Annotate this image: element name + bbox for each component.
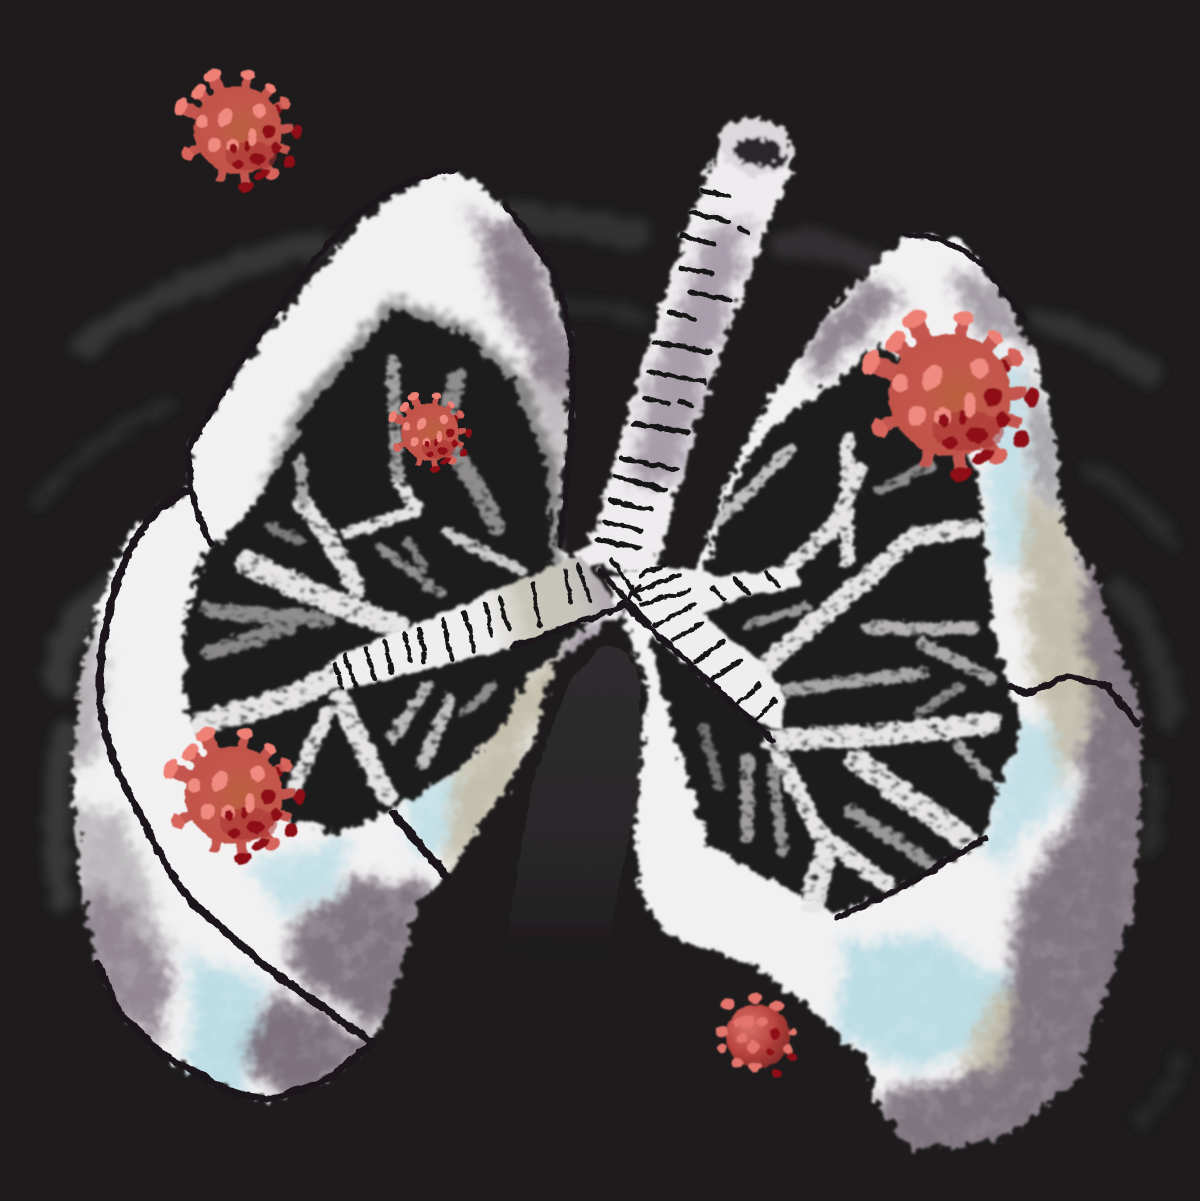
right main bronchus (605, 565, 800, 730)
faint rib strokes (40, 215, 1180, 1120)
right lung fill (610, 220, 1170, 1160)
left cavity chalk haze (250, 310, 552, 600)
cartilage rings on left bronchus (335, 566, 590, 688)
left main bronchus (328, 555, 625, 690)
left lung (60, 160, 640, 1110)
cartilage rings on right bronchus (600, 560, 778, 720)
virus: lower left lung (160, 724, 305, 865)
left inner dark cavity (183, 310, 590, 833)
right lung (610, 220, 1170, 1170)
left airway branches (203, 360, 520, 797)
right lung mottling (825, 289, 1138, 1148)
esophagus column (505, 647, 640, 960)
trachea and main bronchi (328, 112, 810, 730)
virus: upper right lung (858, 306, 1039, 483)
left lung fill (60, 160, 640, 1110)
right airway branches (703, 440, 990, 902)
left lung watercolor shading (60, 215, 630, 1110)
tracheal opening (714, 112, 798, 182)
right inner dark cavity (650, 345, 1020, 915)
virus: inside left lung (387, 390, 472, 473)
windpipe (572, 146, 797, 576)
cartilage rings on windpipe (598, 190, 748, 548)
virus: top left (172, 66, 302, 193)
ink outlines of lung lobes (97, 170, 1137, 1100)
windpipe shading (628, 215, 750, 490)
virus: bottom cluster (716, 993, 797, 1078)
left lung mottling (84, 234, 598, 1092)
right lung watercolor shading (800, 275, 1155, 1170)
